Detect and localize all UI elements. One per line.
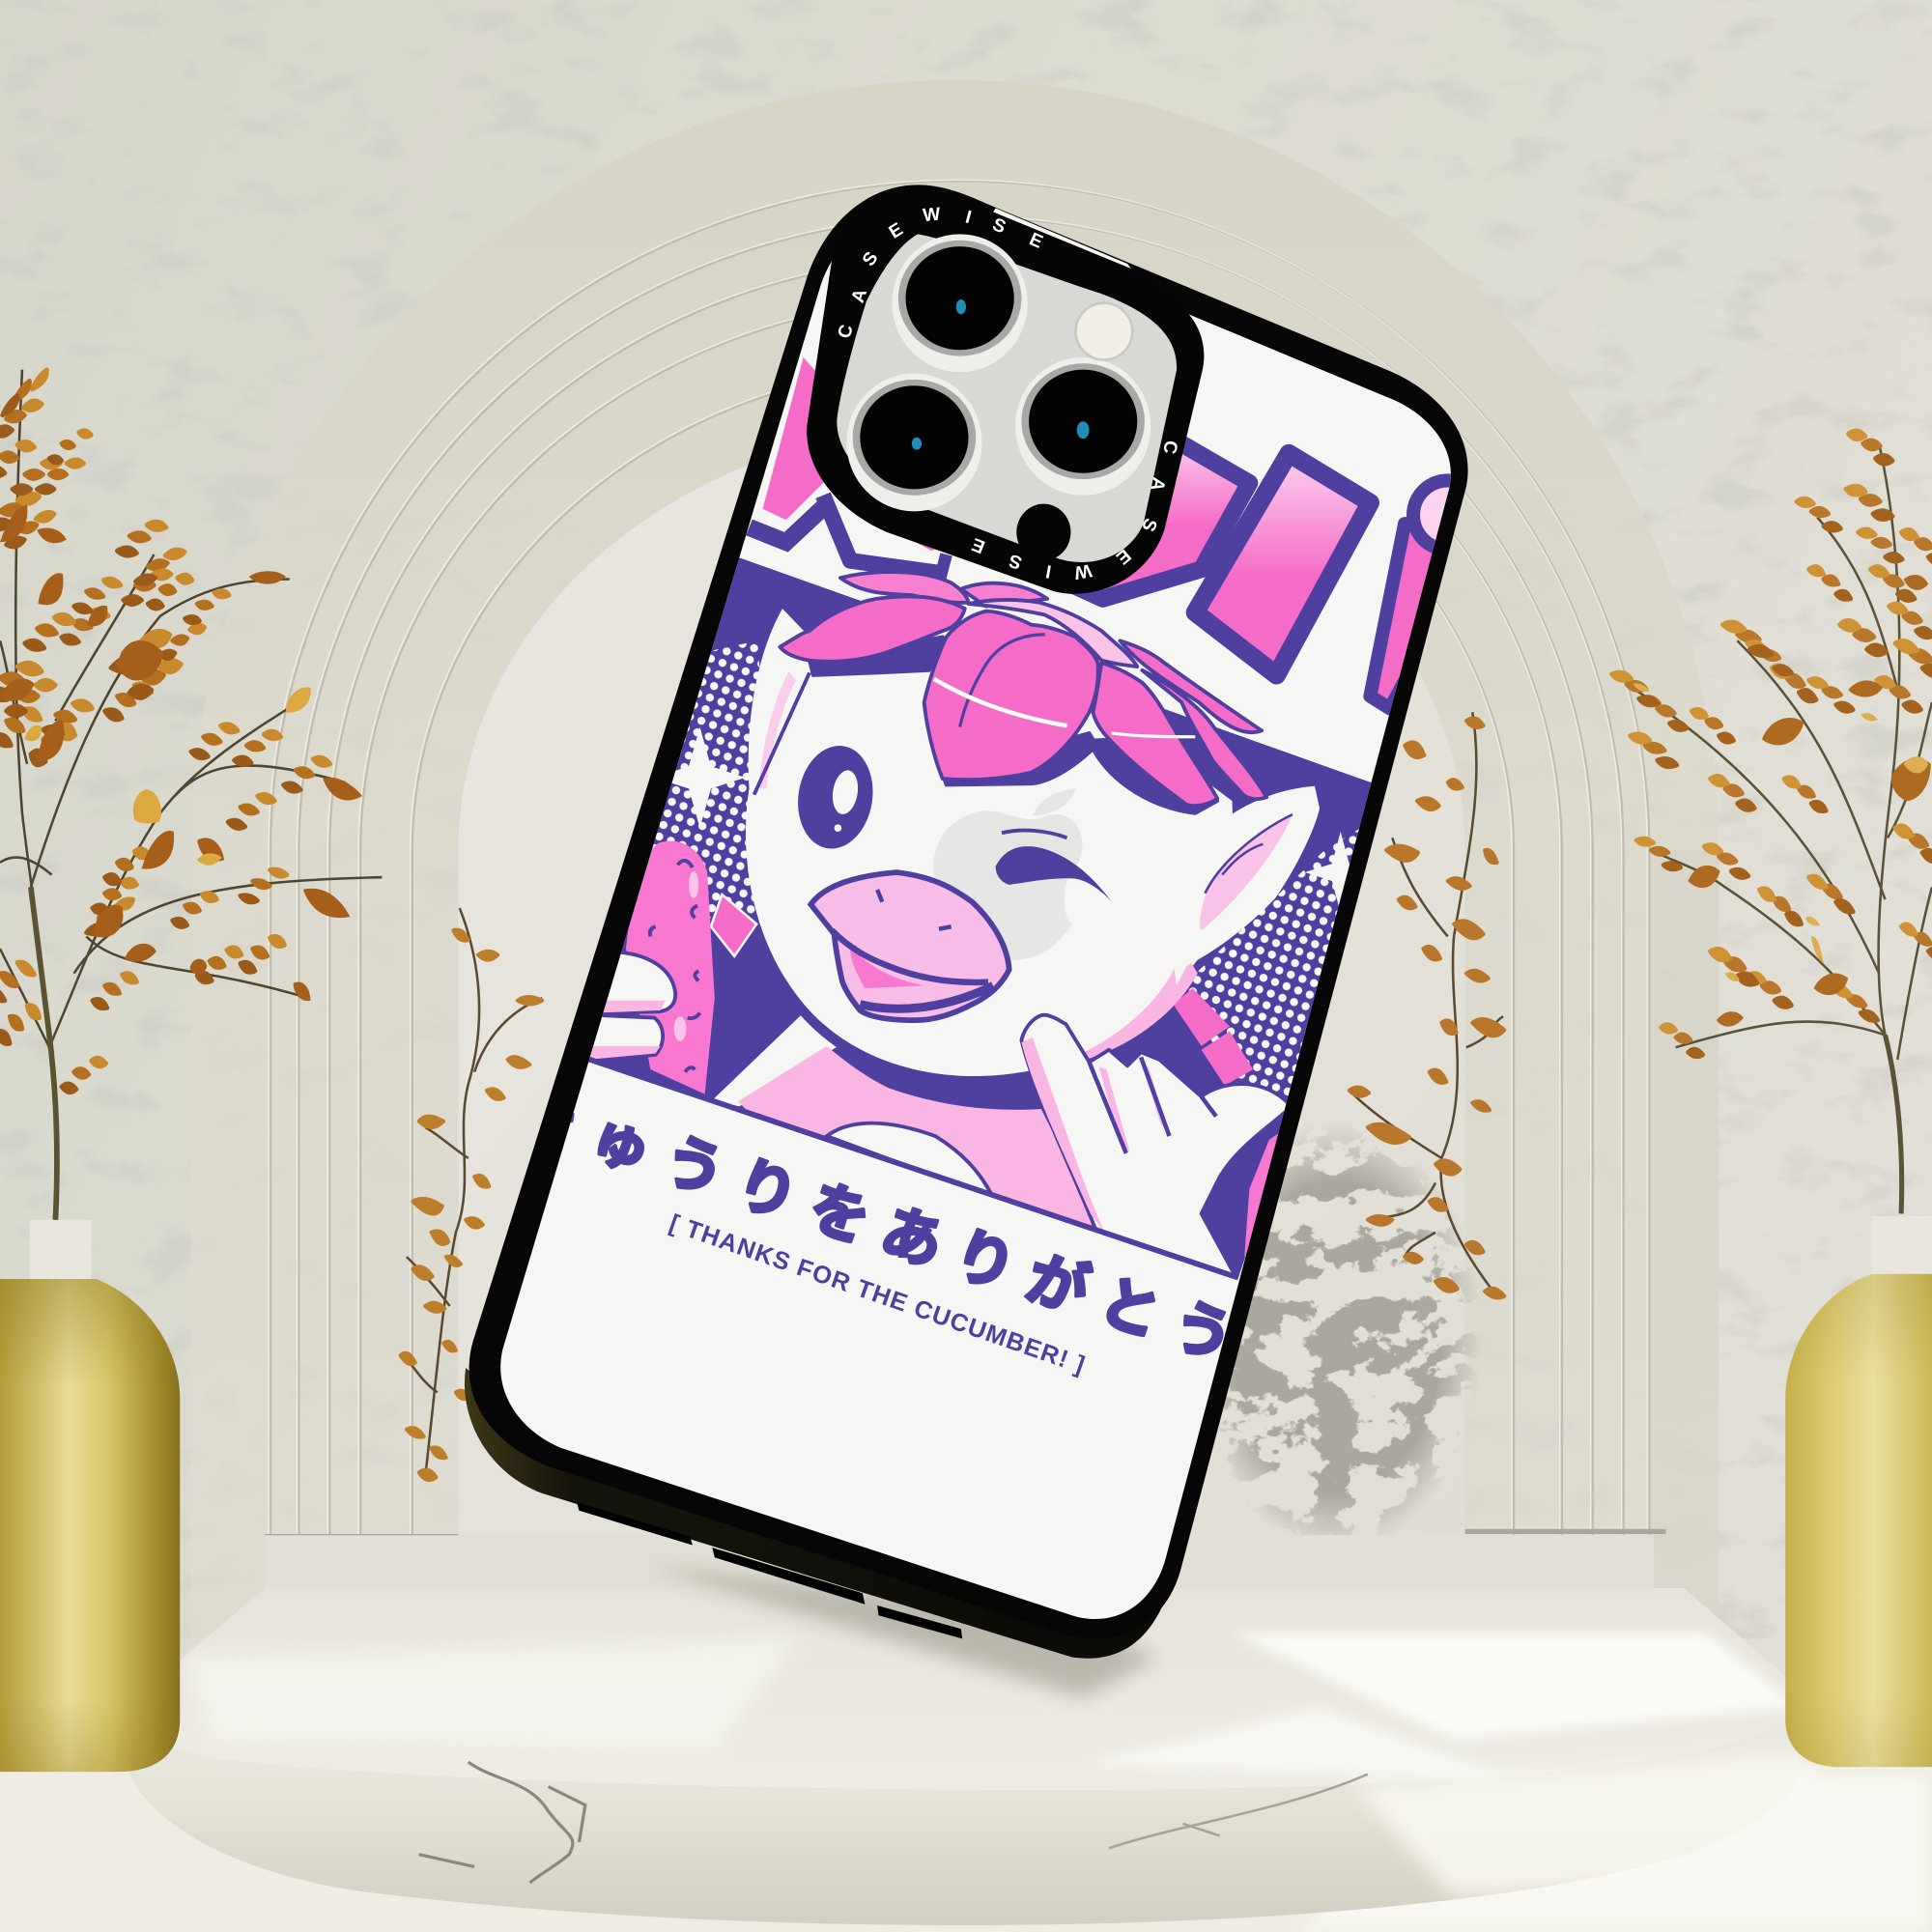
left gold vase [0,1220,180,1772]
face [746,609,1236,1076]
floor [0,1762,1932,1932]
casewise ring text: A [1146,475,1169,493]
right hand [1021,1015,1292,1282]
left halftone [632,640,759,918]
lower right sleeve [1202,1103,1306,1282]
camera silver plate [837,234,1177,562]
pink lettering [750,357,1482,708]
pink body [738,1001,1109,1244]
casewise ring text: E [1026,229,1046,253]
winking eye [996,831,1113,903]
apple logo ghost [933,788,1082,960]
casewise ring text: C [835,323,858,341]
pink stripe beside cucumber [711,895,756,956]
phone case [431,173,1516,1676]
left branch tree [0,370,382,1220]
casewise ring text: E [969,533,988,556]
stepped arch [191,80,1719,1651]
lens 2 [846,373,982,511]
right branch tree [1611,431,1932,1213]
english caption: [ THANKS FOR THE CUCUMBER! ] [666,1209,1088,1379]
right ear [1174,786,1320,985]
panel purple fill [589,557,1372,1277]
casewise ring text: E [886,219,907,243]
casewise ring text: I [963,208,974,228]
lens 3 [1015,357,1151,496]
middle right branch [1350,712,1504,1298]
middle left branch [401,908,542,1480]
phone black bumper [469,185,1468,1638]
japanese headline: きゅうりをありがとう [510,1078,1257,1378]
white sliver of print by the camera [993,209,1131,269]
printed artwork [500,261,1451,1619]
white strip under chin [712,1015,840,1106]
camera module [807,187,1204,594]
open eye [791,740,880,854]
lidar [1016,504,1070,560]
casewise ring text: C [1158,439,1180,456]
casewise ring text: A [848,286,871,305]
camera black ring [807,187,1204,594]
floor band behind platform [265,1535,1654,1595]
casewise ring text: S [989,214,1009,238]
flash [1076,303,1132,359]
casewise ring text: I [1044,560,1053,582]
inner niche [458,425,1465,1602]
casewise ring text: S [1137,515,1160,534]
casewise ring text: S [1007,550,1025,573]
panel lower line [579,1056,1238,1278]
phone side edge and ports [465,1368,1164,1659]
tail [1173,988,1253,1086]
right halftone [1188,829,1359,1095]
right gold vase [1785,1216,1932,1767]
cucumber [626,841,715,1094]
casewise ring text: W [1071,559,1094,582]
phone shadow on platform [640,1565,1158,1698]
casewise ring text: W [922,204,942,226]
casewise ring text: E [1112,545,1134,568]
halftone stars [654,727,1377,913]
left hand holding cucumber [589,951,678,1059]
lens 1 [892,234,1028,372]
beak [810,872,1009,1020]
casewise ring text [835,204,1180,582]
casewise ring text: S [859,248,883,270]
marble veins on niche wall [277,1109,1491,1567]
comic panel [589,557,1372,1278]
hair leaves [780,572,1266,813]
marble platform [124,1588,1811,1925]
